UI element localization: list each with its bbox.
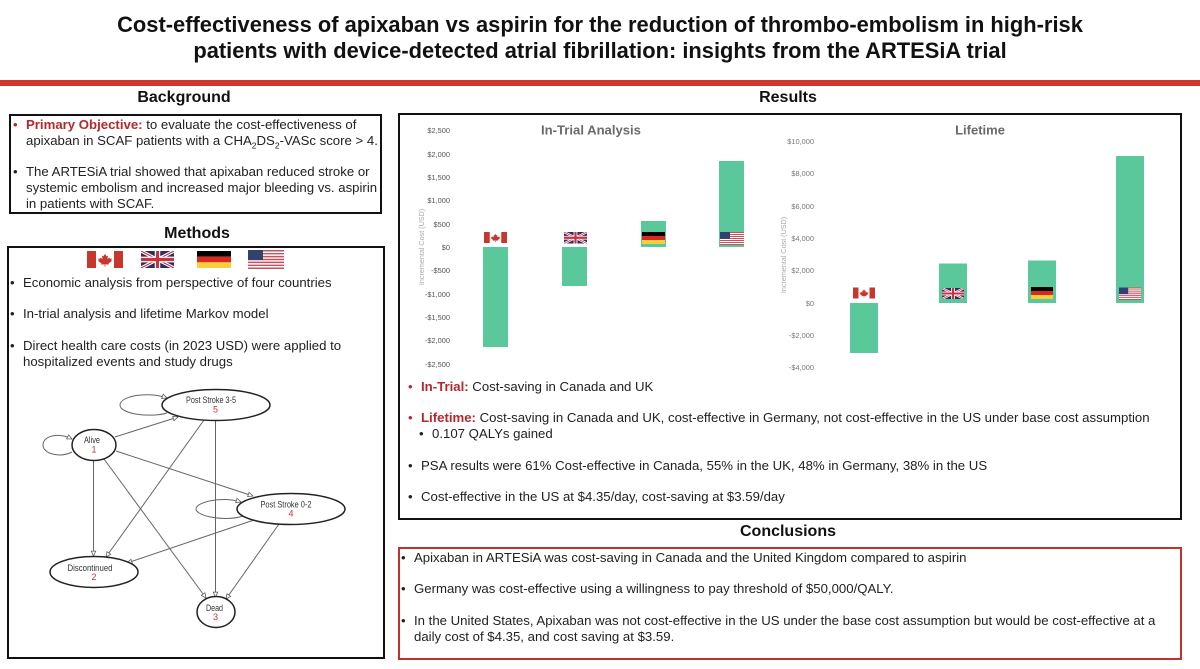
- primary objective text: [26, 117, 378, 151]
- primary objective text: apixaban in SCAF patients with a CHA2DS2-VASc score > 4.: [26, 133, 378, 151]
- panel: background: [9, 114, 382, 214]
- markov model diagram: Post Stroke 3-5: [186, 395, 236, 405]
- chart: in-trial analysis: Incremental Cost (USD): [417, 209, 426, 285]
- chart: lifetime: $2,000: [791, 266, 814, 275]
- title: [117, 12, 1083, 63]
- text: •: [408, 410, 413, 425]
- results text: QALYs gained: 0.107 QALYs gained: [432, 426, 553, 441]
- heading: methods: Methods: [164, 225, 230, 242]
- chart: in-trial analysis: $2,500: [427, 126, 450, 135]
- country flags row: [87, 250, 284, 269]
- panel: conclusions: •: [401, 613, 406, 628]
- chart: in-trial analysis: $500: [434, 220, 450, 229]
- chart: in-trial analysis: $1,500: [427, 173, 450, 182]
- trial summary text: systemic embolism and increased major bleeding vs. aspirin: [26, 180, 377, 195]
- chart: lifetime: $8,000: [791, 169, 814, 178]
- trial summary text: The ARTESiA trial showed that apixaban reduced stroke or: [26, 164, 370, 179]
- markov model diagram: 1: [91, 444, 97, 454]
- methods bullet: costs: Direct health care costs (in 2023 USD) were applied to: [23, 338, 341, 353]
- chart: in-trial analysis: -$2,000: [425, 336, 450, 345]
- markov model diagram: Post Stroke 0-2: [260, 500, 312, 510]
- heading: background: Background: [137, 89, 231, 106]
- chart: lifetime: $0: [806, 299, 814, 308]
- chart: in-trial analysis: In-Trial Analysis: [541, 122, 641, 138]
- markov model diagram: [42, 388, 346, 628]
- bullet: primary objective: •: [13, 117, 18, 132]
- text: •: [10, 275, 15, 290]
- text: •: [408, 458, 413, 473]
- bullet: trial summary: •: [13, 164, 18, 179]
- red divider bar: [0, 80, 1200, 86]
- chart: lifetime: -$4,000: [789, 363, 814, 372]
- chart: lifetime: -$2,000: [789, 331, 814, 340]
- heading: conclusions: Conclusions: [740, 523, 836, 540]
- markov model diagram: Alive: [84, 435, 100, 445]
- conclusion: Germany: Germany was cost-effective using a willingness to pay threshold of $50,000/QALY.: [414, 581, 893, 596]
- chart: lifetime: $6,000: [791, 202, 814, 211]
- title: Cost-effectiveness of apixaban vs aspirin for the reduction of thrombo-embolism in high-risk: [117, 12, 1083, 37]
- chart: in-trial analysis: $2,000: [427, 150, 450, 159]
- chart: in-trial analysis: -$1,000: [425, 290, 450, 299]
- panel: conclusions: •: [401, 581, 406, 596]
- methods bullet: Markov model: In-trial analysis and lifetime Markov model: [23, 306, 269, 321]
- conclusion: United States: daily cost of $4.35, and cost saving at $3.59.: [414, 629, 674, 644]
- conclusion: Canada and UK: Apixaban in ARTESiA was cost-saving in Canada and the United Kingdom compared to aspirin: [414, 550, 966, 565]
- text: •: [419, 426, 424, 441]
- markov model diagram: 5: [213, 404, 218, 414]
- primary objective text: Primary Objective: to evaluate the cost-effectiveness of: [26, 117, 356, 132]
- chart: in-trial analysis: [417, 122, 744, 369]
- markov model diagram: 3: [213, 612, 218, 622]
- text: •: [408, 379, 413, 394]
- chart: lifetime: $10,000: [787, 137, 814, 146]
- chart: lifetime: $4,000: [791, 234, 814, 243]
- methods bullet: costs: hospitalized events and study drugs: [23, 354, 233, 369]
- results text: daily cost: Cost-effective in the US at $4.35/day, cost-saving at $3.59/day: [421, 489, 785, 504]
- markov model diagram: Dead: [206, 603, 223, 613]
- panel: conclusions: •: [401, 550, 406, 565]
- text: •: [10, 338, 15, 353]
- markov model diagram: Discontinued: [68, 563, 112, 573]
- conclusion: United States: [401, 613, 1156, 644]
- panel: results: [398, 113, 1182, 520]
- chart: in-trial analysis: -$2,500: [425, 360, 450, 369]
- text: •: [10, 306, 15, 321]
- title: patients with device-detected atrial fibrillation: insights from the ARTESiA trial: [193, 38, 1007, 63]
- chart: in-trial analysis: -$500: [431, 266, 450, 275]
- panel: methods: [7, 246, 385, 659]
- chart: in-trial analysis: $1,000: [427, 196, 450, 205]
- trial summary text: [26, 164, 377, 211]
- chart: in-trial analysis: -$1,500: [425, 313, 450, 322]
- markov model diagram: 2: [91, 572, 97, 582]
- chart: in-trial analysis: $0: [442, 243, 450, 252]
- results text: lifetime: Lifetime: Cost-saving in Canada and UK, cost-effective in Germany, not cost-effective in the US under base cost assumption: [421, 410, 1150, 425]
- trial summary text: in patients with SCAF.: [26, 196, 154, 211]
- heading: results: Results: [759, 89, 817, 106]
- text: •: [408, 489, 413, 504]
- chart: lifetime: Lifetime: [955, 122, 1005, 138]
- panel: conclusions: [398, 547, 1182, 660]
- methods bullet: four countries: Economic analysis from perspective of four countries: [23, 275, 332, 290]
- chart: lifetime: Incremental Cost (USD): [779, 217, 788, 293]
- markov model diagram: 4: [288, 508, 294, 518]
- conclusion: United States: In the United States, Apixaban was not cost-effective in the US under the base cost assumption but would be cost-effective at a: [414, 613, 1155, 628]
- methods bullet: costs: [10, 338, 341, 369]
- results text: PSA: PSA results were 61% Cost-effective in Canada, 55% in the UK, 48% in Germany, 38% in the US: [421, 458, 987, 473]
- results text: in-trial: In-Trial: Cost-saving in Canada and UK: [421, 379, 653, 394]
- chart: lifetime: [779, 122, 1144, 372]
